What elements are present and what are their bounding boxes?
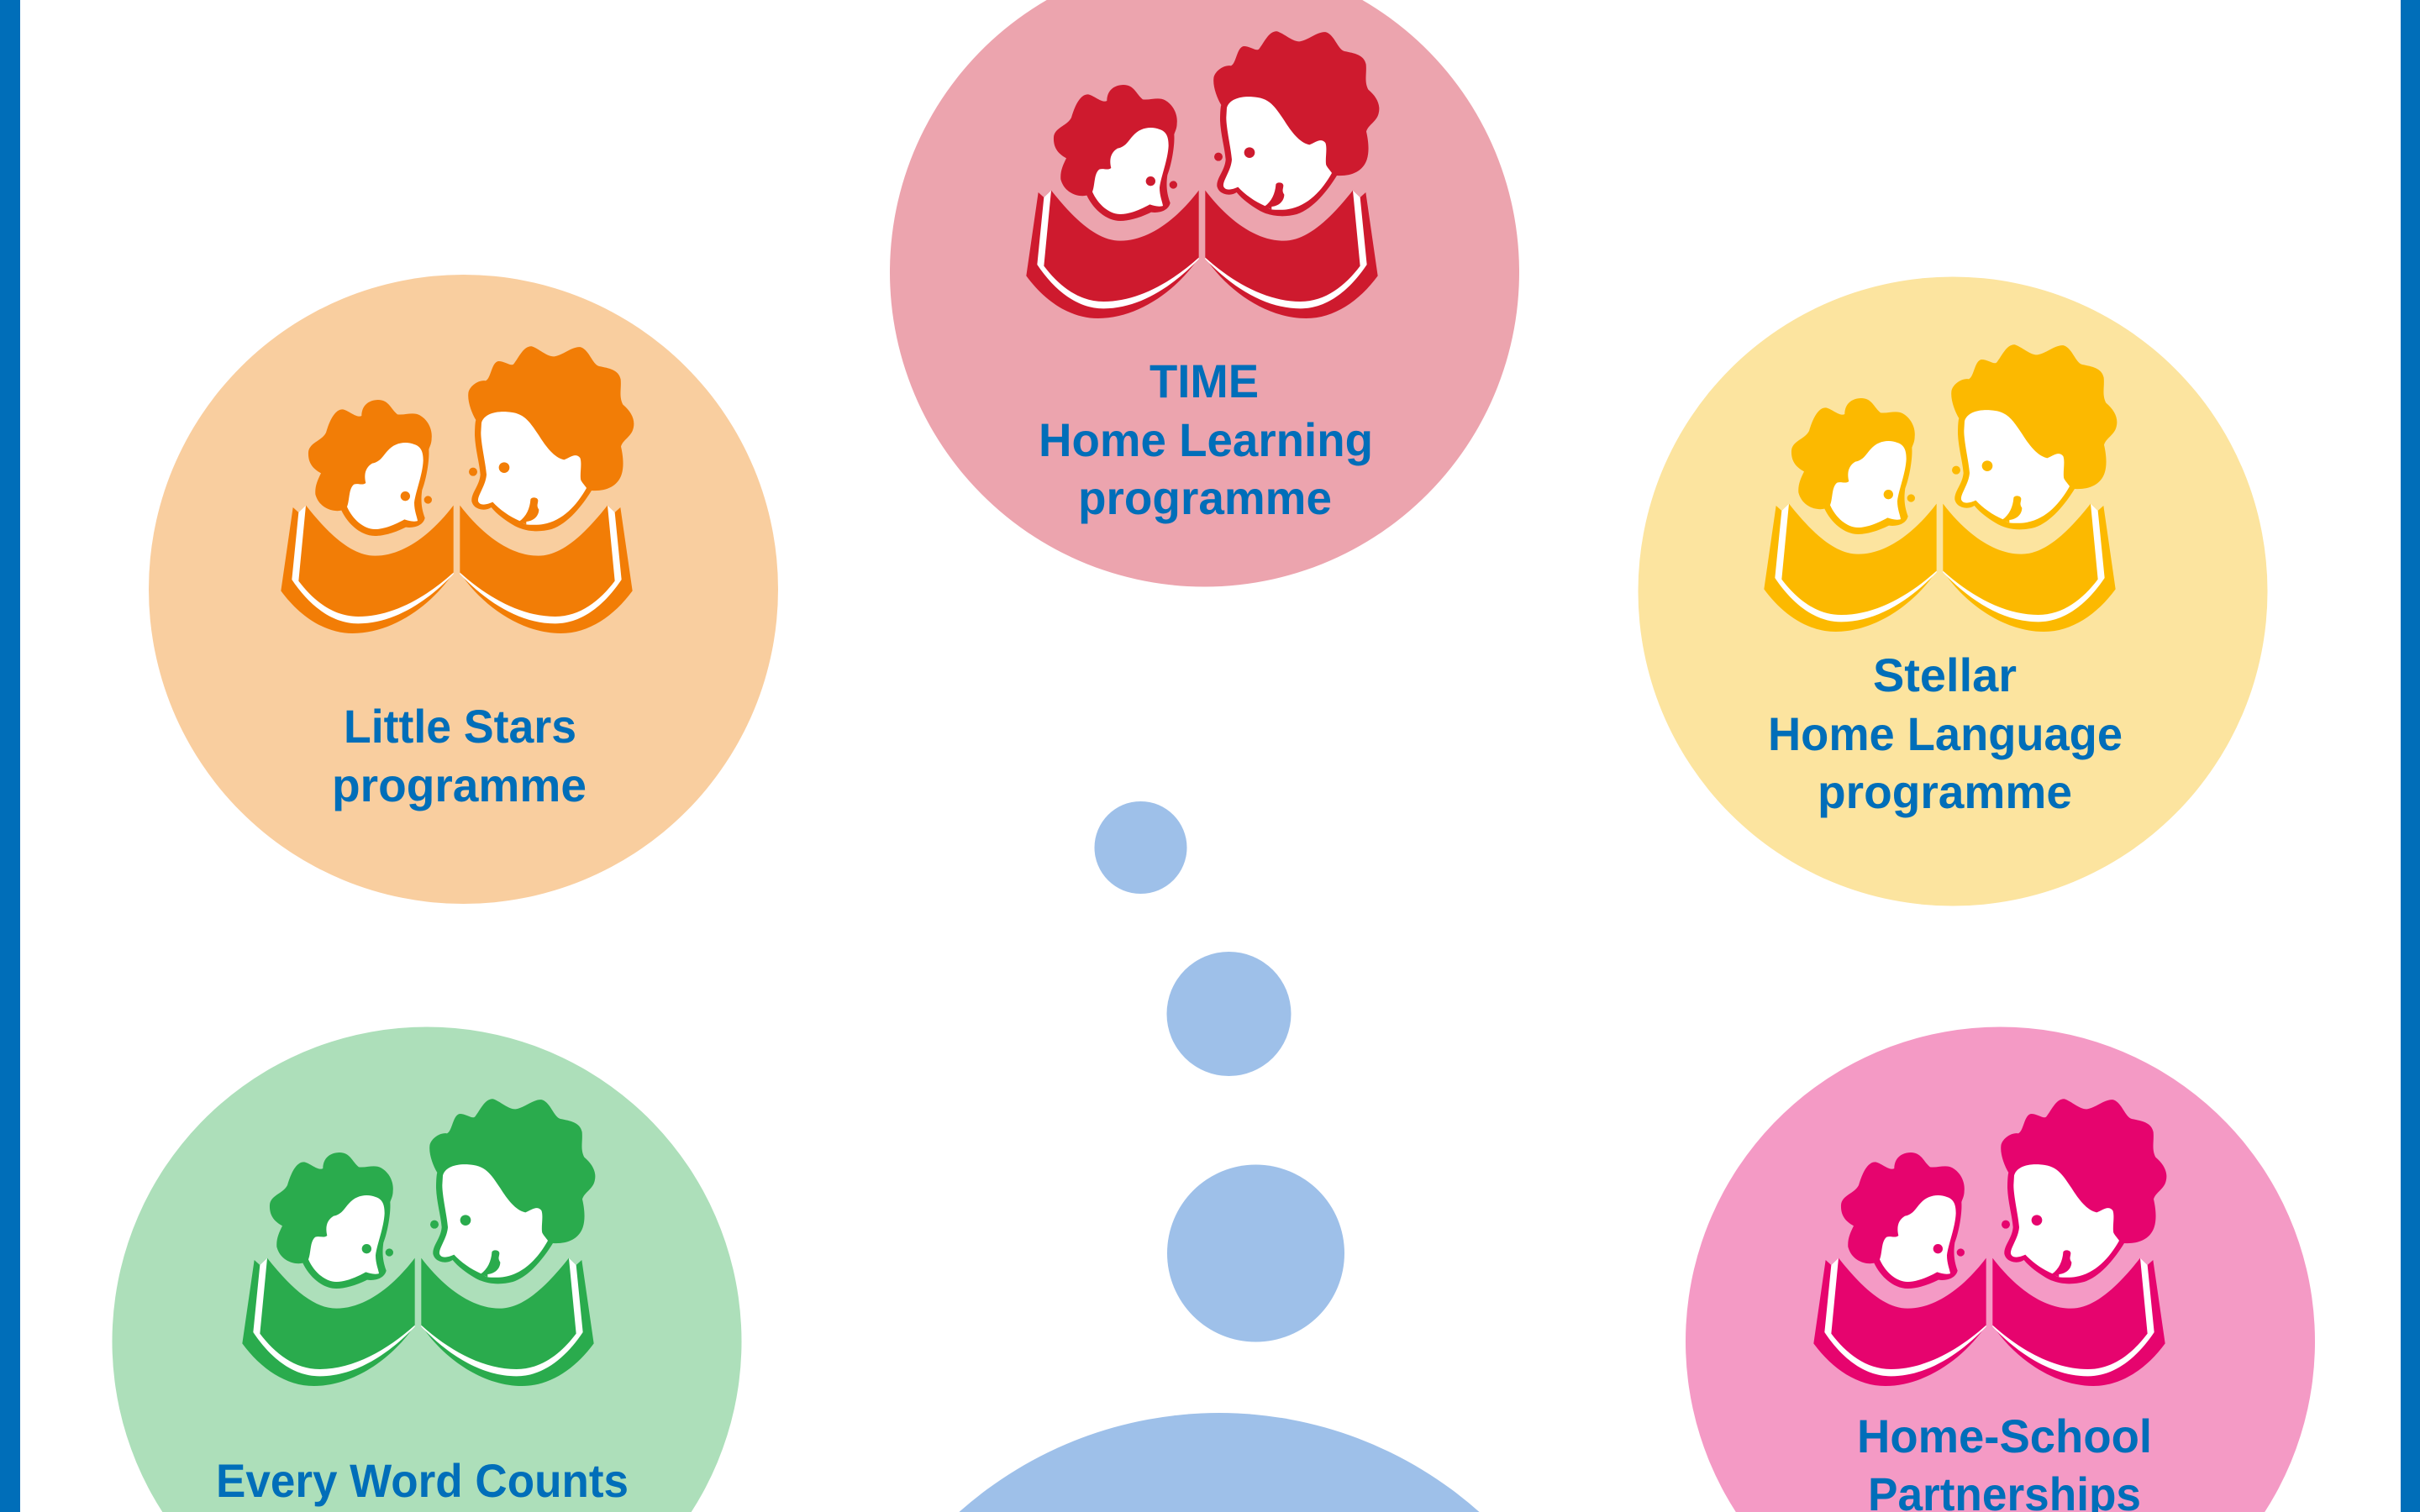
panel: Home-School Partnerships bbox=[1686, 1026, 2315, 1512]
label: Stellar Home Language programme: programme bbox=[1818, 765, 2072, 818]
label: Home-School Partnerships bbox=[1857, 1410, 2152, 1512]
label: Little Stars programme bbox=[332, 700, 587, 811]
icon: parent and child reading (yellow) bbox=[1764, 344, 2117, 632]
thought bubble: medium bbox=[1167, 1164, 1344, 1342]
label: Stellar Home Language programme bbox=[1768, 648, 2123, 818]
label: TIME Home Learning programme: Home Learning bbox=[1039, 413, 1373, 466]
icon: parent and child reading (magenta) bbox=[1813, 1099, 2166, 1386]
panel: Little Stars programme bbox=[149, 275, 778, 904]
thought bubble: small bbox=[1166, 952, 1291, 1076]
panel: TIME Home Learning programme bbox=[890, 0, 1519, 587]
thought bubble: smallest bbox=[1094, 801, 1186, 894]
label: TIME Home Learning programme bbox=[1039, 354, 1373, 524]
label: Stellar Home Language programme: Stellar bbox=[1873, 648, 2017, 701]
label: TIME Home Learning programme: programme bbox=[1078, 471, 1332, 524]
right frame border bbox=[2401, 0, 2420, 1512]
panel: Every Word Counts bbox=[113, 1026, 742, 1512]
label: TIME Home Learning programme: TIME bbox=[1150, 354, 1259, 407]
panel: Stellar Home Language programme bbox=[1639, 277, 2267, 906]
label: Stellar Home Language programme: Home Language bbox=[1768, 707, 2123, 760]
thought bubble: large bbox=[960, 1413, 1479, 1512]
label: Home-School Partnerships: Home-School bbox=[1857, 1410, 2152, 1462]
label: Every Word Counts: Every Word Counts bbox=[216, 1454, 629, 1507]
icon: parent and child reading (green) bbox=[242, 1099, 595, 1386]
left frame border bbox=[0, 0, 20, 1512]
icon: parent and child reading (orange) bbox=[281, 346, 634, 633]
icon: parent and child reading (red) bbox=[1026, 31, 1379, 318]
label: Little Stars programme: programme bbox=[332, 759, 587, 811]
label: Little Stars programme: Little Stars bbox=[344, 700, 576, 753]
